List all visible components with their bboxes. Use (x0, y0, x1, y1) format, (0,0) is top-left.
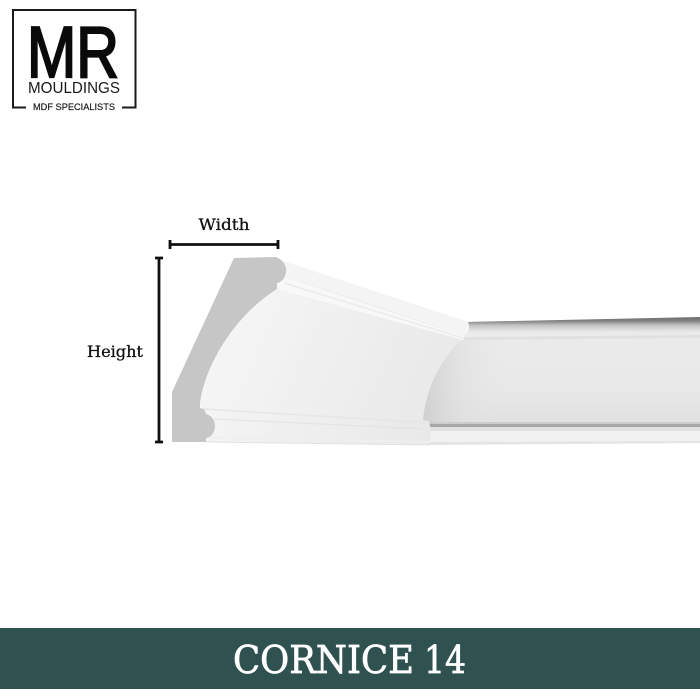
title banner (0, 628, 700, 689)
title banner: 14 (424, 638, 466, 682)
logo: MR Mouldings: MDF SPECIALISTS (33, 102, 115, 113)
front mitred face of moulding (200, 259, 469, 445)
lower moulding ledge (204, 409, 428, 423)
cornice moulding illustration (172, 257, 700, 445)
upper moulding ledge (277, 259, 469, 336)
dimension: width (170, 215, 278, 249)
logo: MR Mouldings: MOULDINGS (28, 80, 120, 97)
logo: MR Mouldings (13, 10, 136, 113)
grey cut profile (172, 257, 286, 442)
dimension: height: Height (87, 342, 144, 361)
logo: MR Mouldings: MR (27, 13, 119, 93)
title banner: CORNICE (233, 638, 414, 682)
dimension: height (87, 258, 163, 442)
dimension: width: Width (198, 215, 250, 234)
right straight run of moulding (420, 317, 700, 445)
